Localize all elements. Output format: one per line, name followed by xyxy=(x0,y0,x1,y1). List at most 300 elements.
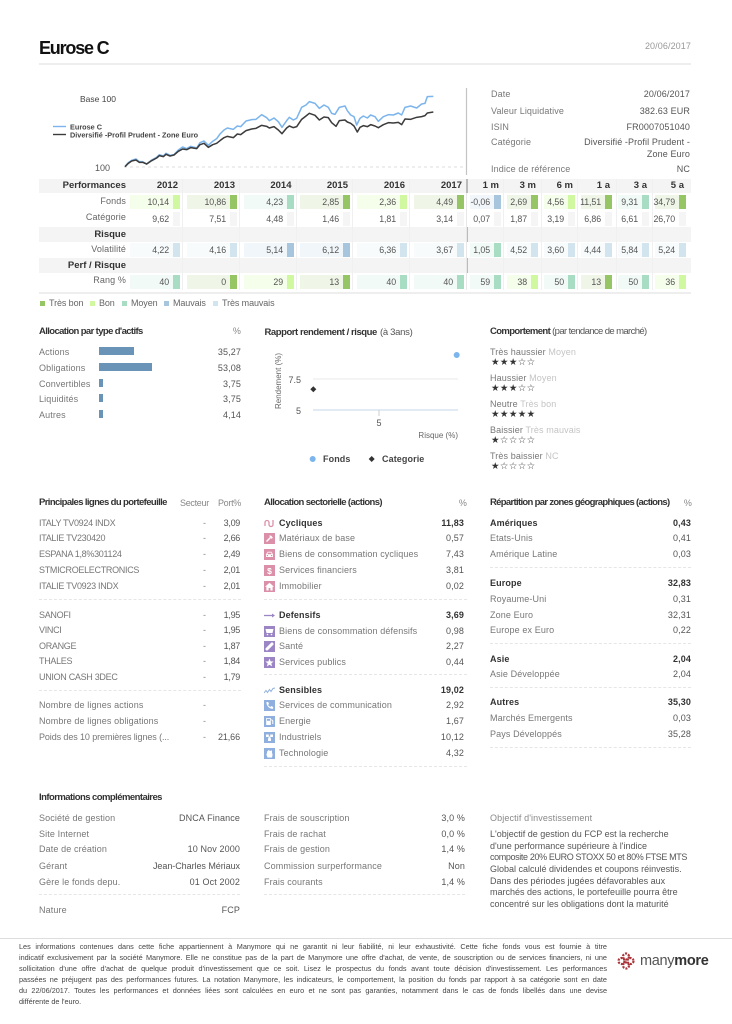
row: catégorie values: 6,61 xyxy=(621,214,638,224)
portfolio totals: - xyxy=(203,732,206,742)
table header row: 2017 xyxy=(441,180,462,191)
row: rang values: 29 xyxy=(273,277,283,287)
row: fonds values: 34,79 xyxy=(653,197,675,207)
rating legend xyxy=(40,298,274,308)
row: rang values: 50 xyxy=(628,277,638,287)
panel: rapport rendement / risque scatter chart: 5 xyxy=(296,406,301,416)
icon: car xyxy=(264,549,275,560)
group: autres: Autres xyxy=(490,697,519,707)
group: autres: 0,03 xyxy=(673,713,691,723)
objective text: d'une performance supérieure à l'indice xyxy=(490,841,647,851)
row: fonds values: 9,31 xyxy=(621,197,638,207)
line chart: base 100 performance: Diversifié -Profil Prudent - Zone Euro xyxy=(70,130,199,140)
panel: rapport rendement / risque scatter chart: Rapport rendement / risque xyxy=(264,327,377,338)
group: cycliques: 0,57 xyxy=(446,533,464,543)
bar: actions: Actions xyxy=(39,347,69,357)
group: cycliques: Matériaux de base xyxy=(279,533,355,543)
group: europe: Europe ex Euro xyxy=(490,625,554,635)
group: autres: Marchés Emergents xyxy=(490,713,573,723)
panel: frais: Non xyxy=(448,861,465,871)
panel: frais: Frais de rachat xyxy=(264,829,326,839)
objective text: Global calculé dividendes et coupons réinvestis. xyxy=(490,864,682,874)
holdings group 2: UNION CASH 3DEC xyxy=(39,672,118,682)
icon: defensive arrow xyxy=(264,614,275,618)
group: defensifs xyxy=(264,610,464,668)
bar: actions: 35,27 xyxy=(218,347,241,357)
disclaimer text: Les informations contenues dans cette fiche appartiennent à Manymore qui ne garantit ni leur fiabilité, ni leur exhaustivité. Cette fiche fonds vous est fournie à titre xyxy=(19,942,607,951)
holdings group 2 xyxy=(39,610,240,682)
panel: allocation par type d'actifs xyxy=(39,326,241,420)
row: fonds values: 2,36 xyxy=(379,197,396,207)
table header row: Performances xyxy=(63,180,126,191)
panel: informations complémentaires xyxy=(39,791,240,916)
portfolio totals: Poids des 10 premières lignes (... xyxy=(39,732,169,742)
panel: frais: Frais de gestion xyxy=(264,844,330,854)
bar: convertibles xyxy=(39,379,241,389)
row: rang values: 13 xyxy=(591,277,601,287)
row: catégorie values: 7,51 xyxy=(209,214,226,224)
holdings group 1: ITALIE TV230420 xyxy=(39,533,105,543)
icon: nuclear xyxy=(264,732,275,742)
bar: autres: 4,14 xyxy=(223,410,241,420)
line chart: base 100 performance: 100 xyxy=(95,163,110,173)
bar: liquidités: Liquidités xyxy=(39,394,78,404)
row: catégorie values xyxy=(152,212,686,226)
holdings group 1: ITALY TV0924 INDX xyxy=(39,518,115,528)
company details: DNCA Finance xyxy=(179,813,240,823)
row: rang values: 0 xyxy=(221,277,226,287)
group: europe xyxy=(490,577,691,636)
heading: Informations complémentaires xyxy=(39,792,162,803)
group: amériques: Amérique Latine xyxy=(490,549,557,559)
table header row: 1 a xyxy=(597,180,610,191)
group: sensibles: Sensibles xyxy=(279,685,322,695)
group: europe: 0,31 xyxy=(673,594,691,604)
table header row: 6 m xyxy=(557,180,573,191)
row: volatilité values: 6,12 xyxy=(322,245,339,255)
rating legend: Moyen xyxy=(131,298,158,308)
bar: liquidités: 3,75 xyxy=(223,394,241,404)
row: catégorie values: 1,87 xyxy=(510,214,527,224)
panel: répartition par zones géographiques xyxy=(490,496,692,748)
group: amériques: 0,41 xyxy=(673,533,691,543)
heading: Objectif d'investissement xyxy=(490,813,592,823)
holdings group 2: - xyxy=(203,656,206,666)
row: volatilité values xyxy=(152,243,686,257)
icon: pill xyxy=(264,641,275,652)
fund key facts xyxy=(491,89,690,174)
row: volatilité values: 5,84 xyxy=(621,245,638,255)
table header row: 2012 xyxy=(157,180,178,191)
objective text: concentré sur les obligations dont la maturité xyxy=(490,899,669,909)
company details xyxy=(39,812,240,888)
footer rule xyxy=(0,938,732,939)
row: volatilité values: 3,67 xyxy=(436,245,453,255)
group: amériques: 0,43 xyxy=(673,518,691,528)
table header row: 2014 xyxy=(270,180,292,191)
group: amériques: 0,03 xyxy=(673,549,691,559)
behaviour: très baissier: Très baissier NC xyxy=(490,451,559,461)
row: volatilité values: 4,52 xyxy=(510,245,527,255)
icon: logo flower xyxy=(617,952,635,970)
heading: Allocation par type d'actifs xyxy=(39,326,143,337)
row: rang values: 38 xyxy=(517,277,527,287)
holdings group 1: STMICROELECTRONICS xyxy=(39,565,139,575)
icon: fuel pump xyxy=(264,716,275,726)
row: volatilité values: 5,24 xyxy=(658,245,675,255)
row: fonds values: 10,86 xyxy=(204,197,226,207)
holdings group 2: 1,84 xyxy=(224,656,240,666)
section label: risque: Risque xyxy=(94,229,126,240)
stars: 5 of 5: ★★★★★ xyxy=(491,409,536,420)
title: Eurose C xyxy=(39,38,108,58)
table header row: 1 m xyxy=(483,180,499,191)
company details: Gère le fonds depu. xyxy=(39,877,120,887)
row: fonds values: 4,23 xyxy=(266,197,283,207)
portfolio totals: Nombre de lignes actions xyxy=(39,700,143,710)
rating legend: Très bon xyxy=(49,298,83,308)
holdings group 1: - xyxy=(203,581,206,591)
icon: phone xyxy=(264,700,275,710)
group: defensifs: 0,44 xyxy=(446,657,464,667)
row: catégorie values: 26,70 xyxy=(653,214,675,224)
group: amériques: Etats-Unis xyxy=(490,533,533,543)
row: catégorie values: 1,46 xyxy=(322,214,339,224)
group: cycliques: Services financiers xyxy=(279,565,357,575)
row: fonds values: -0,06 xyxy=(470,197,490,207)
row: fonds values xyxy=(130,195,686,209)
bar: autres xyxy=(39,410,241,420)
icon: hand xyxy=(264,748,275,758)
group: defensifs: Defensifs xyxy=(279,610,321,620)
group: defensifs: Services publics xyxy=(279,657,346,667)
fund key facts: FR0007051040 xyxy=(626,122,690,132)
panel: frais: Frais de souscription xyxy=(264,813,350,823)
row: volatilité values: 6,36 xyxy=(379,245,396,255)
row label: fonds: Fonds xyxy=(100,196,126,206)
panel: frais: 0,0 % xyxy=(441,829,465,839)
company details: Date de création xyxy=(39,844,107,854)
group: amériques: Amériques xyxy=(490,518,538,528)
panel: rapport rendement / risque scatter chart xyxy=(264,327,460,464)
row: fonds values: 4,56 xyxy=(547,197,564,207)
fund nature xyxy=(39,904,240,916)
panel: principales lignes du portefeuille xyxy=(39,497,241,742)
behaviour: haussier: Haussier Moyen xyxy=(490,373,557,383)
heading: Répartition par zones géographiques (actions) xyxy=(490,497,669,508)
portfolio totals: 21,66 xyxy=(218,732,240,742)
behaviour: baissier: Baissier Très mauvais xyxy=(490,425,581,435)
icon: dollar: $ xyxy=(267,565,272,575)
group: autres: 35,28 xyxy=(668,729,691,739)
group: autres: 35,30 xyxy=(668,697,691,707)
objective text: composite 20% EURO STOXX 50 et 80% FTSE MTS xyxy=(490,852,687,862)
group: cycliques: Immobilier xyxy=(279,581,322,591)
fund key facts: Zone Euro xyxy=(647,149,690,159)
header rule xyxy=(39,63,691,65)
line chart: base 100 performance: Base 100 xyxy=(80,94,116,104)
row: volatilité values: 3,60 xyxy=(547,245,564,255)
bar: convertibles: Convertibles xyxy=(39,379,90,389)
disclaimer text: indicatif exclusivement par la société Manymore. Elle ne constitue pas de la part de Manymore une offre d'achat, de vente, de souscription ou de services financiers, ni une xyxy=(19,953,607,962)
line chart: base 100 performance xyxy=(53,88,468,175)
table header row: 2016 xyxy=(384,180,405,191)
objective text: marchés des actions, le portefeuille pourra être xyxy=(490,887,678,897)
row: fonds values: 4,49 xyxy=(436,197,453,207)
fund nature: Nature xyxy=(39,905,67,915)
panel: allocation sectorielle xyxy=(264,497,467,767)
panel: frais: 1,4 % xyxy=(441,844,465,854)
disclaimer text: du 22/06/2017. Toutes les performances et données liées sont calculées en euro et ne sont pas garanties, notamment dans le cas de fonds libellés dans une devise xyxy=(19,986,607,995)
bar: convertibles: 3,75 xyxy=(223,379,241,389)
panel: allocation sectorielle: % xyxy=(459,498,467,508)
icon: cyclical wave xyxy=(264,520,274,528)
row: catégorie values: 4,48 xyxy=(266,214,283,224)
group: sensibles: 4,32 xyxy=(446,748,464,758)
fund key facts: Diversifié -Profil Prudent - xyxy=(584,137,690,147)
group: defensifs: Biens de consommation défensifs xyxy=(279,626,417,636)
behaviour: très haussier: Très haussier Moyen xyxy=(490,347,576,357)
behaviour: neutre: Neutre Très bon xyxy=(490,399,556,409)
group: cycliques: Cycliques xyxy=(279,518,323,528)
group: asie: 2,04 xyxy=(673,654,691,664)
holdings group 1: - xyxy=(203,533,206,543)
group: sensibles: 19,02 xyxy=(441,685,464,695)
group: sensibles: Technologie xyxy=(279,748,328,758)
group: europe: 32,83 xyxy=(668,578,691,588)
row: catégorie values: 3,14 xyxy=(436,214,453,224)
disclaimer text xyxy=(19,941,607,1007)
row: fonds values: 2,69 xyxy=(510,197,527,207)
disclaimer text: différente de l'euro. xyxy=(19,997,81,1006)
group: defensifs: Santé xyxy=(279,641,303,651)
panel: rapport rendement / risque scatter chart: Fonds xyxy=(323,454,350,464)
row label: rang: Rang % xyxy=(93,275,126,285)
row: volatilité values: 4,16 xyxy=(209,245,226,255)
icon: house xyxy=(264,581,275,592)
table header row xyxy=(63,180,684,191)
group: sensibles: Industriels xyxy=(279,732,321,742)
rating legend: Très mauvais xyxy=(222,298,274,308)
holdings group 1: - xyxy=(203,549,206,559)
holdings group 2: THALES xyxy=(39,656,72,666)
panel: objectif d'investissement xyxy=(490,812,690,912)
holdings group 1: - xyxy=(203,518,206,528)
group: europe: Europe xyxy=(490,578,522,588)
row: rang values: 59 xyxy=(480,277,490,287)
panel: frais: 1,4 % xyxy=(441,877,465,887)
panel: frais: 3,0 % xyxy=(441,813,465,823)
icon: dollar xyxy=(264,565,275,576)
row: catégorie values: 0,07 xyxy=(473,214,490,224)
company details: Jean-Charles Mériaux xyxy=(153,861,240,871)
group: defensifs: 0,98 xyxy=(446,626,464,636)
group: europe: Royaume-Uni xyxy=(490,594,546,604)
group: asie xyxy=(490,653,691,680)
company details: 10 Nov 2000 xyxy=(188,844,240,854)
icon: star xyxy=(264,657,275,668)
row: rang values: 13 xyxy=(329,277,339,287)
table header row: 3 m xyxy=(520,180,536,191)
row: volatilité values: 5,14 xyxy=(266,245,283,255)
group: cycliques: Biens de consommation cycliques xyxy=(279,549,418,559)
group: sensibles: Energie xyxy=(279,716,311,726)
panel: frais: Frais courants xyxy=(264,877,323,887)
group: cycliques xyxy=(264,518,464,592)
panel: rapport rendement / risque scatter chart: (à 3ans) xyxy=(380,327,413,338)
table header row: 2015 xyxy=(327,180,348,191)
group: autres: Pays Développés xyxy=(490,729,562,739)
company details: 01 Oct 2002 xyxy=(190,877,240,887)
portfolio totals: Nombre de lignes obligations xyxy=(39,716,158,726)
holdings group 1: 2,49 xyxy=(224,549,240,559)
bar: autres: Autres xyxy=(39,410,66,420)
holdings group 2: VINCI xyxy=(39,625,62,635)
row: rang values xyxy=(130,275,686,289)
table header row: 2013 xyxy=(214,180,235,191)
objective text: Dans des périodes jugées défavorables aux xyxy=(490,876,665,886)
portfolio totals: - xyxy=(203,716,206,726)
heading: Allocation sectorielle (actions) xyxy=(264,497,382,508)
bar: liquidités xyxy=(39,394,241,404)
group: asie: Asie Développée xyxy=(490,669,560,679)
rating legend: Mauvais xyxy=(173,298,206,308)
objective text: L'objectif de gestion du FCP est la recherche xyxy=(490,829,669,839)
row: rang values: 40 xyxy=(443,277,453,287)
stars: 3 of 5: ★★★☆☆ xyxy=(491,383,536,394)
group: cycliques: 7,43 xyxy=(446,549,464,559)
bar: obligations: Obligations xyxy=(39,363,85,373)
holdings group 2: - xyxy=(203,625,206,635)
disclaimer text: passées ne préjugent pas des performances futures. La notation Manymore, les indicateurs, le comportement, la position du fonds par rapport à sa catégorie sont en date xyxy=(19,975,607,984)
portfolio totals xyxy=(39,700,240,742)
rating legend: Bon xyxy=(99,298,115,308)
panel: allocation par type d'actifs: % xyxy=(233,326,241,336)
group: europe: 32,31 xyxy=(668,610,691,620)
stars: 1 of 5: ★☆☆☆☆ xyxy=(491,435,536,446)
portfolio totals: - xyxy=(203,700,206,710)
performance table xyxy=(39,179,691,294)
row label: catégorie: Catégorie xyxy=(86,212,126,222)
group: autres xyxy=(490,696,691,740)
row: volatilité values: 4,22 xyxy=(152,245,169,255)
holdings group 2: 1,95 xyxy=(224,625,240,635)
group: europe: 0,22 xyxy=(673,625,691,635)
row: rang values: 36 xyxy=(665,277,675,287)
column headings: Secteur xyxy=(180,498,209,508)
holdings group 2: - xyxy=(203,610,206,620)
holdings group 1 xyxy=(39,518,240,591)
fund nature: FCP xyxy=(222,905,240,915)
company details: Société de gestion xyxy=(39,813,115,823)
report date: 20/06/2017 xyxy=(645,41,691,51)
icon: sensitive zigzag xyxy=(264,684,275,696)
column headings xyxy=(180,498,241,508)
holdings group 2: 1,95 xyxy=(224,610,240,620)
group: sensibles: Services de communication xyxy=(279,700,392,710)
panel: rapport rendement / risque scatter chart: 7.5 xyxy=(288,375,301,385)
icon: cart xyxy=(264,626,275,637)
fund key facts: NC xyxy=(677,164,690,174)
row: fonds values: 10,14 xyxy=(147,197,169,207)
panel: rapport rendement / risque scatter chart: 5 xyxy=(376,418,382,428)
stars: 1 of 5: ★☆☆☆☆ xyxy=(491,461,536,472)
column headings: Port% xyxy=(218,498,241,508)
fund key facts: ISIN xyxy=(491,122,509,132)
group: sensibles xyxy=(264,684,464,759)
row: rang values: 40 xyxy=(159,277,169,287)
group: sensibles: 1,67 xyxy=(446,716,464,726)
panel: répartition par zones géographiques: % xyxy=(684,498,692,508)
group: amériques xyxy=(490,517,691,560)
group: asie: 2,04 xyxy=(673,669,691,679)
holdings group 1: 3,09 xyxy=(224,518,240,528)
logo wordmark: manymore xyxy=(640,953,709,969)
logo: manymore xyxy=(617,951,711,971)
stars: 3 of 5: ★★★☆☆ xyxy=(491,357,536,368)
heading: Comportement (par tendance de marché) xyxy=(490,326,647,337)
group: defensifs: 2,27 xyxy=(446,641,464,651)
panel: frais xyxy=(264,812,465,895)
fund key facts: 382.63 EUR xyxy=(640,106,690,116)
group: cycliques: 3,81 xyxy=(446,565,464,575)
group: asie: Asie xyxy=(490,654,510,664)
row: catégorie values: 3,19 xyxy=(547,214,564,224)
holdings group 2: 1,79 xyxy=(224,672,240,682)
panel: frais: Commission surperformance xyxy=(264,861,382,871)
group: defensifs: 3,69 xyxy=(446,610,464,620)
holdings group 1: ITALIE TV0923 INDX xyxy=(39,581,118,591)
bar: actions xyxy=(39,347,241,357)
section label: perf / risque: Perf / Risque xyxy=(68,260,126,271)
holdings group 2: SANOFI xyxy=(39,610,71,620)
row: fonds values: 2,85 xyxy=(322,197,339,207)
holdings group 2: - xyxy=(203,672,206,682)
fund key facts: Catégorie xyxy=(491,137,531,147)
holdings group 1: 2,66 xyxy=(224,533,240,543)
panel: comportement xyxy=(490,326,647,472)
panel: rapport rendement / risque scatter chart: Rendement (%) xyxy=(274,353,283,409)
line chart: base 100 performance: Eurose C xyxy=(70,122,103,132)
company details: Site Internet xyxy=(39,829,89,839)
fund key facts: 20/06/2017 xyxy=(644,89,690,99)
row: volatilité values: 1,05 xyxy=(473,245,490,255)
fund key facts: Valeur Liquidative xyxy=(491,106,564,116)
group: cycliques: 0,02 xyxy=(446,581,464,591)
holdings group 2: - xyxy=(203,641,206,651)
heading: Principales lignes du portefeuille xyxy=(39,497,167,508)
table header row: 5 a xyxy=(671,180,684,191)
row: rang values: 40 xyxy=(386,277,396,287)
bar: obligations: 53,08 xyxy=(218,363,241,373)
holdings group 2: 1,87 xyxy=(224,641,240,651)
holdings group 1: - xyxy=(203,565,206,575)
icon: hammer xyxy=(264,533,275,544)
fund key facts: Date xyxy=(491,89,510,99)
disclaimer text: sollicitation d'une offre d'achat de quelque produit d'investissement que ce soit. Lisez le prospectus du fonds avant toute décision d'investissement. Les performances xyxy=(19,964,607,973)
row label: volatilité: Volatilité xyxy=(91,244,126,254)
company details: Gérant xyxy=(39,861,67,871)
panel: rapport rendement / risque scatter chart: Categorie xyxy=(382,454,424,464)
row: catégorie values: 1,81 xyxy=(379,214,396,224)
holdings group 1: 2,01 xyxy=(224,581,240,591)
row: catégorie values: 6,86 xyxy=(584,214,601,224)
table header row: 3 a xyxy=(634,180,647,191)
group: cycliques: 11,83 xyxy=(441,518,464,528)
panel: rapport rendement / risque scatter chart: Risque (%) xyxy=(418,431,458,440)
group: europe: Zone Euro xyxy=(490,610,533,620)
row: fonds values: 11,51 xyxy=(580,197,601,207)
